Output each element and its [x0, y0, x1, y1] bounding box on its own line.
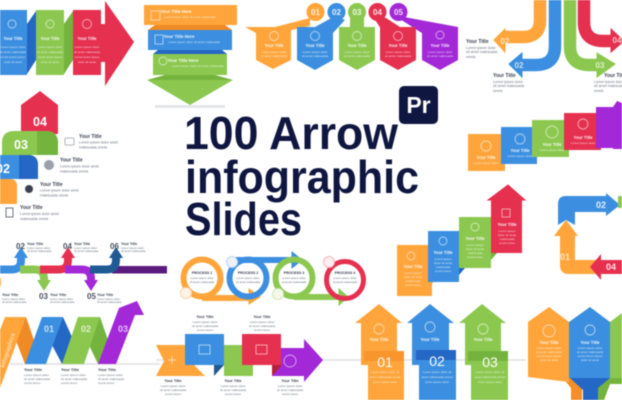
- title: 100 Arrow: [184, 107, 398, 159]
- panel: four curved arrows top right: omnis: [466, 55, 476, 59]
- panel: horizontal ribbon arrow bottom centre: omnis lorem: [254, 328, 271, 332]
- panel: zigzag ribbon arrow: 03: [118, 324, 128, 334]
- panel: branching timeline: 06: [110, 242, 119, 251]
- panel: hexagon funnel bottom right: Lorem ipsum dolor: [537, 346, 561, 350]
- panel: horizontal ribbon arrow bottom centre: sit amet malesuada: [277, 388, 303, 392]
- panel: hexagon funnel bottom right: Your Title: [540, 340, 559, 345]
- panel: zigzag ribbon arrow: Infographics: [0, 332, 17, 369]
- panel: stepped numbered arrow left: Your Title: [60, 158, 83, 164]
- panel: branching timeline: 05: [87, 292, 96, 301]
- panel: horizontal ribbon arrow bottom centre: omnis lorem: [197, 328, 214, 332]
- panel: horizontal folded arrow top left: Lorem ipsum dolor: [75, 45, 99, 49]
- panel: horizontal ribbon arrow bottom centre: [156, 315, 526, 396]
- panel: stepped numbered arrow left: malesuada omnis: [79, 146, 107, 150]
- panel: ascending ribbon arrow: [397, 185, 525, 296]
- panel: stepped numbered arrow left: malesuada omnis: [40, 194, 68, 198]
- panel: zigzag ribbon arrow: sit amet malesuada: [24, 377, 50, 381]
- panel: horizontal ribbon arrow bottom centre: Lorem ipsum dolor: [250, 320, 274, 324]
- panel: looping arrows right: [554, 193, 622, 280]
- panel: hexagon funnel bottom right: dolor sit amet: [540, 358, 558, 362]
- panel: zigzag ribbon arrow: Your Title: [61, 367, 80, 372]
- panel: horizontal folded arrow top left: omnis lorem ipsum: [74, 55, 100, 59]
- panel: branching timeline: Lorem ipsum dolor: [2, 297, 25, 301]
- panel: three numbered up arrows bottom: lorem ipsum dolor: [373, 380, 397, 384]
- panel: horizontal ribbon arrow bottom centre: omnis lorem: [282, 392, 299, 396]
- panel: branching timeline: Lorem ipsum dolor: [27, 246, 50, 250]
- panel: zigzag ribbon arrow: omnis lorem: [24, 381, 41, 385]
- panel: square steps arrow right: Your Title: [511, 148, 530, 153]
- panel: square steps arrow right: Your Title: [543, 142, 562, 147]
- icon: Premiere Pro badge: [399, 86, 438, 124]
- panel: process circles: Lorem ipsum dolor: [190, 276, 214, 280]
- panel: five numbered hexagon tabs: Your Title: [348, 43, 367, 48]
- panel: horizontal ribbon arrow bottom centre: Lorem ipsum dolor: [221, 384, 245, 388]
- panel: zigzag ribbon arrow: Lorem ipsum dolor: [24, 373, 49, 377]
- panel: branching timeline: Your Title: [121, 242, 137, 246]
- panel: branching timeline: Your Title: [27, 242, 43, 246]
- panel: stacked downward arrow: Your Title Here: [161, 9, 192, 14]
- panel: looping arrows right: 04: [606, 262, 616, 272]
- panel: horizontal ribbon arrow bottom centre: omnis lorem: [165, 392, 182, 396]
- panel: branching timeline: Your Title: [74, 242, 90, 246]
- icon: Premiere Pro badge: Pr: [406, 92, 431, 118]
- panel: ascending ribbon arrow: malesuada: [500, 237, 515, 241]
- panel: horizontal ribbon arrow bottom centre: Lorem ipsum dolor: [278, 384, 302, 388]
- panel: zigzag ribbon arrow: omnis lorem: [98, 381, 115, 385]
- panel: horizontal folded arrow top left: Your Title: [4, 36, 23, 41]
- panel: five numbered hexagon tabs: Your Title: [431, 43, 450, 48]
- panel: horizontal ribbon arrow bottom centre: Your Title: [224, 379, 242, 383]
- panel: branching timeline: 02: [16, 242, 25, 251]
- panel: stepped numbered arrow left: Your Title: [40, 182, 63, 188]
- panel: three numbered up arrows bottom: lorem ipsum dolor: [478, 380, 502, 384]
- panel: five numbered hexagon tabs: sit amet malesuada: [302, 54, 328, 58]
- panel: four curved arrows top right: Your Title: [466, 39, 489, 45]
- panel: three numbered up arrows bottom: Lorem ipsum dolor sit: [476, 370, 504, 374]
- panel: hexagon funnel bottom right: sit amet malesuada: [536, 350, 562, 354]
- panel: ascending ribbon arrow: dolor sit amet: [404, 275, 422, 279]
- panel: process circles: Lorem ipsum dolor: [282, 276, 306, 280]
- panel: zigzag ribbon arrow: 02: [81, 324, 91, 334]
- panel: stepped numbered arrow left: Lorem ipsum dolor amet: [20, 212, 59, 216]
- panel: ascending ribbon arrow: omnis lorem: [435, 269, 452, 273]
- panel: three numbered up arrows bottom: Your Title: [474, 337, 493, 342]
- panel: five numbered hexagon tabs: Your Title: [306, 43, 325, 48]
- panel: four curved arrows top right: 02: [501, 37, 510, 46]
- panel: ascending ribbon arrow: omnis lorem: [499, 241, 516, 245]
- panel: five numbered hexagon tabs: Lorem ipsum dolor: [428, 50, 452, 54]
- panel: square steps arrow right: Lorem ipsum dolor: [508, 154, 532, 158]
- panel: horizontal folded arrow top left: dolor sit amet: [41, 60, 59, 64]
- panel: three numbered up arrows bottom: Lorem ipsum dolor sit: [423, 370, 452, 374]
- panel: hexagon funnel bottom right: omnis lorem ipsum: [577, 354, 603, 358]
- panel: process circles: PROCESS 4: [335, 271, 355, 275]
- panel: ascending ribbon arrow: Your Title: [404, 264, 423, 269]
- panel: horizontal folded arrow top left: sit amet malesuada: [74, 50, 100, 54]
- panel: process circles: Lorem ipsum dolor: [236, 276, 260, 280]
- panel: zigzag ribbon arrow: sit amet malesuada: [98, 377, 124, 381]
- panel: process circles: sit amet malesuada: [236, 280, 261, 284]
- panel: square steps arrow right: [468, 101, 622, 171]
- panel: horizontal folded arrow top left: omnis lorem ipsum: [37, 55, 63, 59]
- title: [184, 107, 419, 245]
- panel: horizontal folded arrow top left: sit amet malesuada: [0, 50, 26, 54]
- panel: five numbered hexagon tabs: 05: [394, 8, 403, 17]
- panel: stacked downward arrow: [144, 5, 237, 108]
- panel: four curved arrows top right: 02: [515, 61, 524, 70]
- panel: horizontal folded arrow top left: Lorem ipsum dolor: [1, 45, 25, 49]
- panel: zigzag ribbon arrow: Lorem ipsum dolor: [98, 373, 123, 377]
- panel: three numbered up arrows bottom: Your Title: [370, 337, 389, 342]
- panel: four curved arrows top right: sit amet malesuada: [493, 84, 524, 88]
- panel: horizontal ribbon arrow bottom centre: Your Title: [253, 315, 271, 319]
- panel: branching timeline: sit amet malesuada: [2, 300, 27, 304]
- panel: process circles: Lorem ipsum dolor: [333, 276, 357, 280]
- panel: process circles: sit amet malesuada: [282, 280, 307, 284]
- panel: horizontal folded arrow top left: Lorem ipsum dolor: [38, 45, 62, 49]
- panel: ascending ribbon arrow: malesuada: [468, 251, 483, 255]
- panel: process circles: [180, 252, 364, 305]
- panel: horizontal ribbon arrow bottom centre: sit amet malesuada: [192, 324, 218, 328]
- panel: five numbered hexagon tabs: sit amet malesuada: [261, 54, 287, 58]
- panel: horizontal ribbon arrow bottom centre: Lorem ipsum dolor: [193, 320, 217, 324]
- panel: five numbered hexagon tabs: [245, 3, 458, 70]
- panel: ascending ribbon arrow: Your Title: [434, 250, 453, 255]
- panel: three numbered up arrows bottom: Lorem ipsum dolor sit: [371, 370, 400, 374]
- panel: five numbered hexagon tabs: Lorem ipsum dolor: [386, 50, 410, 54]
- panel: horizontal ribbon arrow bottom centre: Your Title: [196, 315, 214, 319]
- panel: hexagon funnel bottom right: [528, 307, 622, 400]
- panel: stacked downward arrow: Lorem ipsum dolor sit amet malesuada: [168, 40, 220, 44]
- panel: process circles: PROCESS 1: [192, 271, 212, 275]
- panel: branching timeline: sit amet malesuada: [74, 249, 99, 253]
- panel: ascending ribbon arrow: malesuada: [436, 265, 451, 269]
- panel: branching timeline: Your Title: [2, 293, 18, 297]
- panel: stepped numbered arrow left: Lorem ipsum dolor amet: [40, 188, 79, 192]
- panel: branching timeline: 03: [39, 292, 48, 301]
- panel: stacked downward arrow: Your Title Here: [168, 58, 199, 63]
- panel: hexagon funnel bottom right: dolor sit amet: [581, 358, 599, 362]
- panel: three numbered up arrows bottom: amet malesuada omnis: [474, 375, 506, 379]
- panel: horizontal ribbon arrow bottom centre: Your Title: [164, 379, 182, 383]
- panel: three numbered up arrows bottom: 02: [429, 353, 445, 369]
- panel: four curved arrows top right: 03: [596, 61, 605, 70]
- panel: ascending ribbon arrow: dolor sit amet: [498, 233, 516, 237]
- panel: branching timeline: 04: [63, 242, 72, 251]
- panel: horizontal folded arrow top left: dolor sit amet: [4, 60, 22, 64]
- panel: ascending ribbon arrow: Lorem ipsum: [434, 257, 452, 261]
- panel: five numbered hexagon tabs: Lorem ipsum dolor: [345, 50, 369, 54]
- panel: zigzag ribbon arrow: [0, 301, 160, 388]
- panel: five numbered hexagon tabs: 03: [353, 8, 362, 17]
- panel: zigzag ribbon arrow: Your Title: [98, 367, 117, 372]
- panel: square steps arrow right: Lorem ipsum dolor: [540, 148, 564, 152]
- panel: ascending ribbon arrow: Your Title: [466, 236, 485, 241]
- panel: branching timeline: Lorem ipsum dolor: [121, 246, 144, 250]
- panel: three numbered up arrows bottom: amet malesuada omnis: [369, 375, 401, 379]
- panel: branching timeline: Lorem ipsum dolor: [50, 297, 73, 301]
- panel: stacked downward arrow: Lorem ipsum dolor sit amet malesuada: [172, 64, 224, 68]
- panel: stepped numbered arrow left: Lorem ipsum dolor amet: [79, 140, 118, 144]
- panel: ascending ribbon arrow: Lorem ipsum: [466, 243, 484, 247]
- panel: four curved arrows top right: 04: [613, 36, 622, 45]
- panel: stepped numbered arrow left: 04: [33, 115, 47, 129]
- panel: hexagon funnel bottom right: sit amet malesuada: [577, 350, 603, 354]
- panel: branching timeline: Lorem ipsum dolor: [74, 246, 97, 250]
- panel: hexagon funnel bottom right: Your Title: [581, 340, 600, 345]
- panel: five numbered hexagon tabs: Your Title: [265, 43, 284, 48]
- panel: four curved arrows top right: [466, 0, 622, 93]
- panel: ascending ribbon arrow: Lorem ipsum: [498, 229, 516, 233]
- panel: stepped numbered arrow left: malesuada omnis: [60, 170, 88, 174]
- panel: stepped numbered arrow left: Lorem ipsum dolor amet: [60, 164, 99, 168]
- panel: five numbered hexagon tabs: Your Title: [389, 43, 408, 48]
- panel: five numbered hexagon tabs: sit amet malesuada: [385, 54, 411, 58]
- panel: process circles: PROCESS 2: [238, 271, 258, 275]
- panel: horizontal ribbon arrow bottom centre: sit amet malesuada: [220, 388, 246, 392]
- panel: zigzag ribbon arrow: sit amet malesuada: [61, 377, 87, 381]
- panel: four curved arrows top right: omnis: [493, 89, 503, 93]
- panel: three numbered up arrows bottom: amet malesuada omnis: [421, 375, 453, 379]
- panel: horizontal folded arrow top left: omnis lorem ipsum: [0, 55, 26, 59]
- panel: hexagon funnel bottom right: omnis lorem ipsum: [536, 354, 562, 358]
- panel: ascending ribbon arrow: Your Title: [498, 222, 517, 227]
- panel: stacked downward arrow: Lorem ipsum dolor sit amet malesuada: [164, 15, 216, 19]
- panel: horizontal ribbon arrow bottom centre: Lorem ipsum dolor: [161, 384, 185, 388]
- panel: five numbered hexagon tabs: 01: [311, 8, 320, 17]
- panel: stepped numbered arrow left: malesuada omnis: [20, 217, 48, 221]
- panel: zigzag ribbon arrow: Your Title: [24, 367, 43, 372]
- panel: five numbered hexagon tabs: Lorem ipsum dolor: [262, 50, 286, 54]
- panel: five numbered hexagon tabs: sit amet malesuada: [344, 54, 370, 58]
- panel: ascending ribbon arrow: dolor sit amet: [466, 247, 484, 251]
- panel: square steps arrow right: Lorem ipsum dolor: [571, 141, 595, 145]
- panel: horizontal folded arrow top left: [0, 1, 134, 86]
- panel: zigzag ribbon arrow: 01: [44, 324, 54, 334]
- panel: horizontal folded arrow top left: dolor sit amet: [78, 60, 96, 64]
- panel: five numbered hexagon tabs: 04: [373, 8, 382, 17]
- panel: looping arrows right: 01: [560, 252, 570, 262]
- panel: stepped numbered arrow left: Your Title: [20, 205, 43, 211]
- panel: five numbered hexagon tabs: sit amet malesuada: [427, 54, 453, 58]
- panel: four curved arrows top right: Lorem ipsum dolor: [466, 46, 497, 50]
- panel: branching timeline: Your Title: [97, 293, 113, 297]
- panel: stepped numbered arrow left: Your Title: [79, 134, 102, 140]
- panel: zigzag ribbon arrow: omnis lorem: [61, 381, 78, 385]
- panel: horizontal ribbon arrow bottom centre: sit amet malesuada: [160, 388, 186, 392]
- panel: four curved arrows top right: sit amet malesuada: [466, 50, 497, 54]
- panel: zigzag ribbon arrow: Lorem ipsum dolor: [61, 373, 86, 377]
- panel: four curved arrows top right: omnis: [594, 89, 604, 93]
- panel: stepped numbered arrow left: 03: [14, 138, 28, 152]
- panel: square steps arrow right: Your Title: [574, 135, 593, 140]
- panel: branching timeline: sit amet malesuada: [27, 249, 52, 253]
- panel: branching timeline: sit amet malesuada: [97, 300, 122, 304]
- panel: process circles: sit amet malesuada: [333, 280, 358, 284]
- panel: horizontal ribbon arrow bottom centre: Your Title: [281, 379, 299, 383]
- panel: three numbered up arrows bottom: lorem ipsum dolor: [425, 380, 449, 384]
- panel: looping arrows right: 02: [596, 200, 606, 210]
- panel: stacked downward arrow: Your Title Here: [164, 34, 195, 39]
- panel: process circles: sit amet malesuada: [190, 280, 215, 284]
- panel: stepped numbered arrow left: [0, 91, 118, 221]
- panel: square steps arrow right: Lorem ipsum dolor: [474, 161, 498, 165]
- panel: branching timeline: Lorem ipsum dolor: [97, 297, 120, 301]
- panel: branching timeline: Your Title: [50, 293, 66, 297]
- panel: horizontal ribbon arrow bottom centre: omnis lorem: [225, 392, 242, 396]
- title: Slides: [185, 193, 302, 245]
- panel: hexagon funnel bottom right: Lorem ipsum dolor: [578, 346, 602, 350]
- panel: five numbered hexagon tabs: Lorem ipsum dolor: [303, 50, 327, 54]
- panel: three numbered up arrows bottom: 03: [482, 354, 498, 370]
- panel: three numbered up arrows bottom: 01: [377, 354, 393, 370]
- title: infographic: [185, 151, 419, 203]
- panel: process circles: PROCESS 3: [284, 271, 304, 275]
- panel: ascending ribbon arrow: omnis lorem: [405, 283, 422, 287]
- panel: five numbered hexagon tabs: 02: [332, 8, 341, 17]
- panel: horizontal folded arrow top left: sit amet malesuada: [37, 50, 63, 54]
- panel: horizontal folded arrow top left: Your Title: [78, 36, 97, 41]
- panel: ascending ribbon arrow: malesuada: [406, 279, 421, 283]
- panel: square steps arrow right: Your Title: [477, 155, 496, 160]
- panel: branching timeline: [0, 242, 167, 304]
- panel: ascending ribbon arrow: Lorem ipsum: [404, 271, 422, 275]
- panel: three numbered up arrows bottom: [355, 304, 508, 400]
- panel: branching timeline: sit amet malesuada: [50, 300, 75, 304]
- panel: horizontal folded arrow top left: Your Title: [41, 36, 60, 41]
- panel: three numbered up arrows bottom: Your Title: [421, 337, 440, 342]
- panel: four curved arrows top right: Lorem ipsum dolor: [493, 80, 524, 84]
- panel: four curved arrows top right: Your Title: [493, 73, 516, 79]
- panel: ascending ribbon arrow: omnis lorem: [467, 255, 484, 259]
- panel: horizontal ribbon arrow bottom centre: sit amet malesuada: [249, 324, 275, 328]
- panel: branching timeline: sit amet malesuada: [121, 249, 146, 253]
- panel: ascending ribbon arrow: dolor sit amet: [434, 261, 452, 265]
